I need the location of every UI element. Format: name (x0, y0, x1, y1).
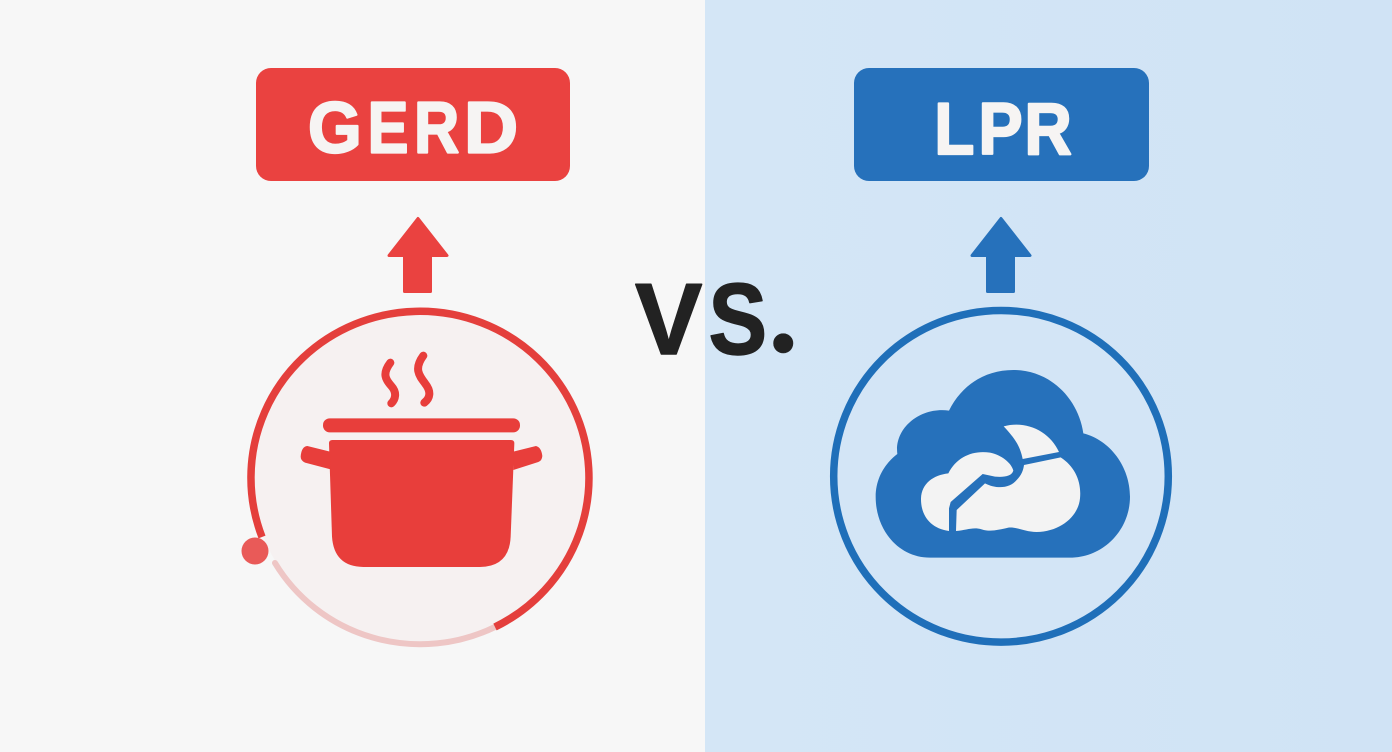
pale arc segment (275, 563, 495, 644)
cloud shape (876, 370, 1130, 558)
red progress arc (251, 311, 589, 627)
heading: GERD label: D (464, 88, 518, 168)
icon: throat cloud circle (834, 310, 1168, 642)
heading: GERD label (256, 68, 570, 181)
pot lid (323, 418, 520, 432)
heading: LPR label (854, 68, 1149, 181)
pot handles (301, 446, 542, 470)
throat lower lobe (956, 457, 1080, 532)
heading: GERD label: R (414, 88, 459, 169)
panel: GERD side (242, 68, 589, 644)
heading: VS.: V (635, 264, 702, 376)
circle outline (834, 310, 1168, 642)
throat left lobe (921, 452, 1013, 531)
arc end dot (242, 538, 268, 564)
heading: VS.: . (768, 244, 798, 378)
arrow: red up arrow (389, 218, 447, 292)
icon: cooking pot (301, 356, 542, 567)
pot body (329, 440, 514, 567)
panel: right background (705, 0, 1392, 752)
steam (385, 356, 429, 403)
throat upper lobe (1004, 425, 1059, 459)
arrow: blue up arrow (972, 218, 1030, 292)
heading: VS. (635, 244, 798, 378)
heading: LPR label: L (934, 88, 974, 170)
panel: LPR side (834, 68, 1168, 642)
heading: GERD label: E (368, 89, 408, 169)
heading: LPR label: R (1024, 88, 1072, 170)
panel: left background (0, 0, 705, 752)
circle background (252, 312, 586, 642)
heading: GERD label: G (308, 87, 362, 168)
heading: LPR label: P (978, 88, 1023, 170)
icon: stomach pot circle (242, 311, 589, 644)
heading: VS.: S (708, 263, 767, 376)
icon: cloud with throat (876, 370, 1130, 558)
